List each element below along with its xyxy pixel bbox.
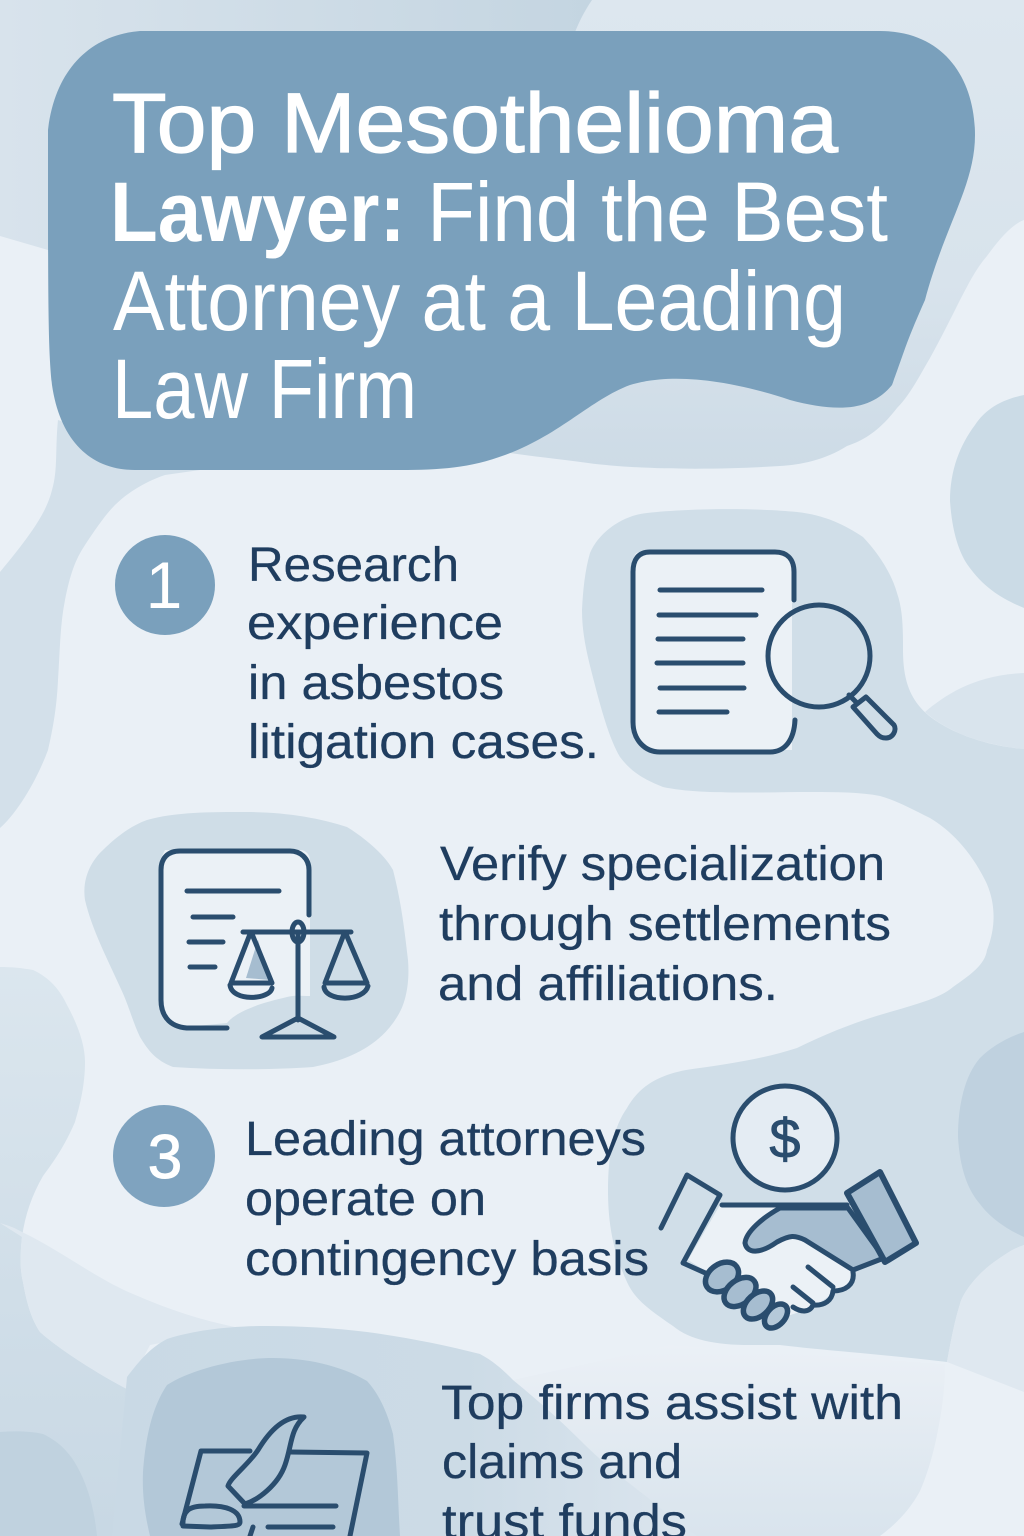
panel: step 1 [115,535,895,769]
text: step 2: Verify specialization [440,838,885,891]
title: Lawyer: Find the Best [110,165,888,259]
text: step 1: experience [247,597,503,650]
icon: document and scales [84,812,408,1069]
text: step 2 [438,838,891,1011]
text: step 4 [441,1377,903,1536]
title: Top Mesothelioma [112,76,838,170]
number badge 3 [113,1105,215,1207]
text: step 3 [245,1113,649,1286]
number badge 3: 3 [148,1123,182,1192]
icon: handshake with dollar coin [661,1086,916,1332]
text: step 4: claims and [442,1436,682,1489]
text: step 3: operate on [245,1173,486,1226]
text: step 2: and affiliations. [438,958,778,1011]
panel: step 4 [143,1358,903,1536]
text: step 3: contingency basis [245,1233,649,1286]
icon: handshake with dollar coin: $ [769,1107,801,1170]
panel: title banner [48,31,975,470]
title: Law Firm [112,342,417,436]
text: step 2: through settlements [439,898,891,951]
panel: step 3 [113,1086,916,1332]
text: step 3: Leading attorneys [245,1113,646,1166]
text: step 1 [247,539,599,769]
number badge 1: 1 [146,548,182,622]
title [110,76,888,436]
text: step 1: Research [248,539,459,592]
text: step 4: Top firms assist with [441,1377,903,1430]
icon: document and magnifier [633,552,895,752]
panel: step 2 [84,812,891,1069]
text: step 1: litigation cases. [248,716,599,769]
text: step 1: in asbestos [248,657,504,710]
icon: quill and document [143,1358,400,1536]
title: Attorney at a Leading [113,254,846,348]
number badge 1 [115,535,215,635]
